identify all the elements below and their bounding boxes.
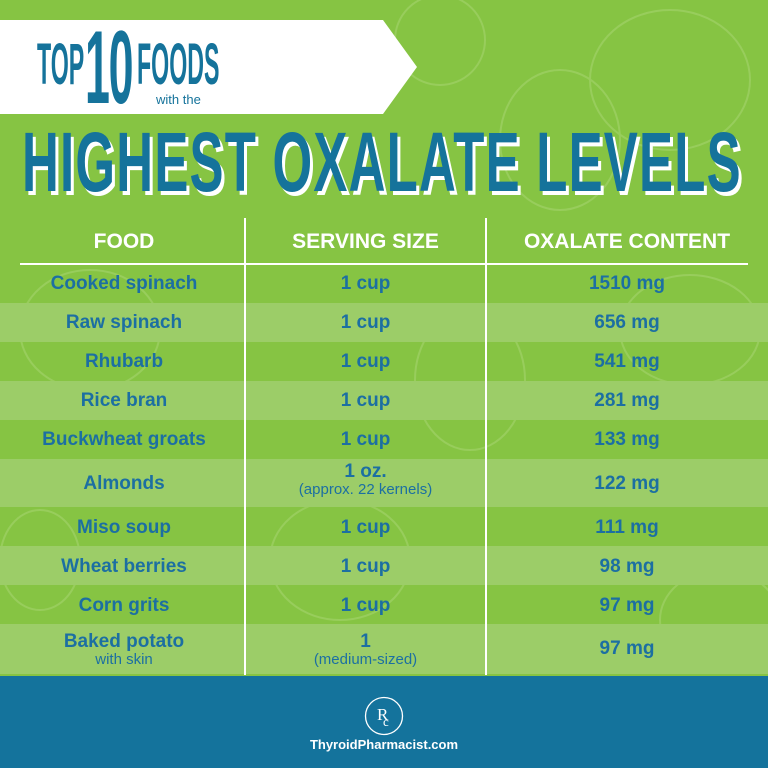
table header: SERVING SIZE <box>292 230 439 253</box>
footer <box>0 676 768 768</box>
table rows: 1 cup <box>341 556 390 577</box>
main title: HIGHEST OXALATE LEVELS <box>22 115 742 209</box>
table rows: 97 mg <box>600 638 654 659</box>
banner: top 10 foods: FOODS <box>137 32 219 97</box>
banner: top 10 foods: 10 <box>85 10 132 126</box>
table rows: 97 mg <box>600 595 654 616</box>
table rows: 656 mg <box>594 312 660 333</box>
table rows: 1 <box>360 631 371 652</box>
banner: top 10 foods: TOP <box>37 32 84 97</box>
table rows: 111 mg <box>595 517 659 538</box>
table header: FOOD <box>94 230 154 253</box>
table rows <box>42 273 665 668</box>
table rows: 1 oz. <box>344 461 387 482</box>
table rows: 281 mg <box>594 390 660 411</box>
table header <box>94 230 730 253</box>
main title: HIGHEST OXALATE LEVELS <box>25 119 745 213</box>
table rows: Corn grits <box>79 595 169 616</box>
table rows: Raw spinach <box>66 312 182 333</box>
banner: top 10 foods <box>0 10 417 126</box>
table rows: Baked potato <box>64 631 184 652</box>
logo: c <box>383 714 389 729</box>
website text: ThyroidPharmacist.com <box>310 737 458 752</box>
table grid lines <box>244 218 246 675</box>
table rows: (medium-sized) <box>314 651 417 668</box>
table rows: Miso soup <box>77 517 171 538</box>
table rows: 1 cup <box>341 517 390 538</box>
table rows: Buckwheat groats <box>42 429 206 450</box>
table rows: 133 mg <box>594 429 660 450</box>
table rows: (approx. 22 kernels) <box>299 481 432 498</box>
logo <box>364 696 404 736</box>
table rows: 1510 mg <box>589 273 665 294</box>
table header: OXALATE CONTENT <box>524 230 730 253</box>
table rows: Almonds <box>83 473 165 494</box>
table rows: 1 cup <box>341 595 390 616</box>
table rows: Rhubarb <box>85 351 163 372</box>
table rows: 541 mg <box>594 351 660 372</box>
logo: R <box>377 705 389 724</box>
table rows: Cooked spinach <box>51 273 197 294</box>
table rows: 1 cup <box>341 351 390 372</box>
table rows: 122 mg <box>594 473 660 494</box>
table rows: Rice bran <box>81 390 167 411</box>
table rows: 1 cup <box>341 273 390 294</box>
table rows: 1 cup <box>341 429 390 450</box>
table rows: with skin <box>95 651 153 668</box>
table rows: 1 cup <box>341 312 390 333</box>
table rows: 1 cup <box>341 390 390 411</box>
banner: top 10 foods: with the <box>156 92 201 107</box>
table rows: 98 mg <box>600 556 654 577</box>
table rows: Wheat berries <box>61 556 187 577</box>
